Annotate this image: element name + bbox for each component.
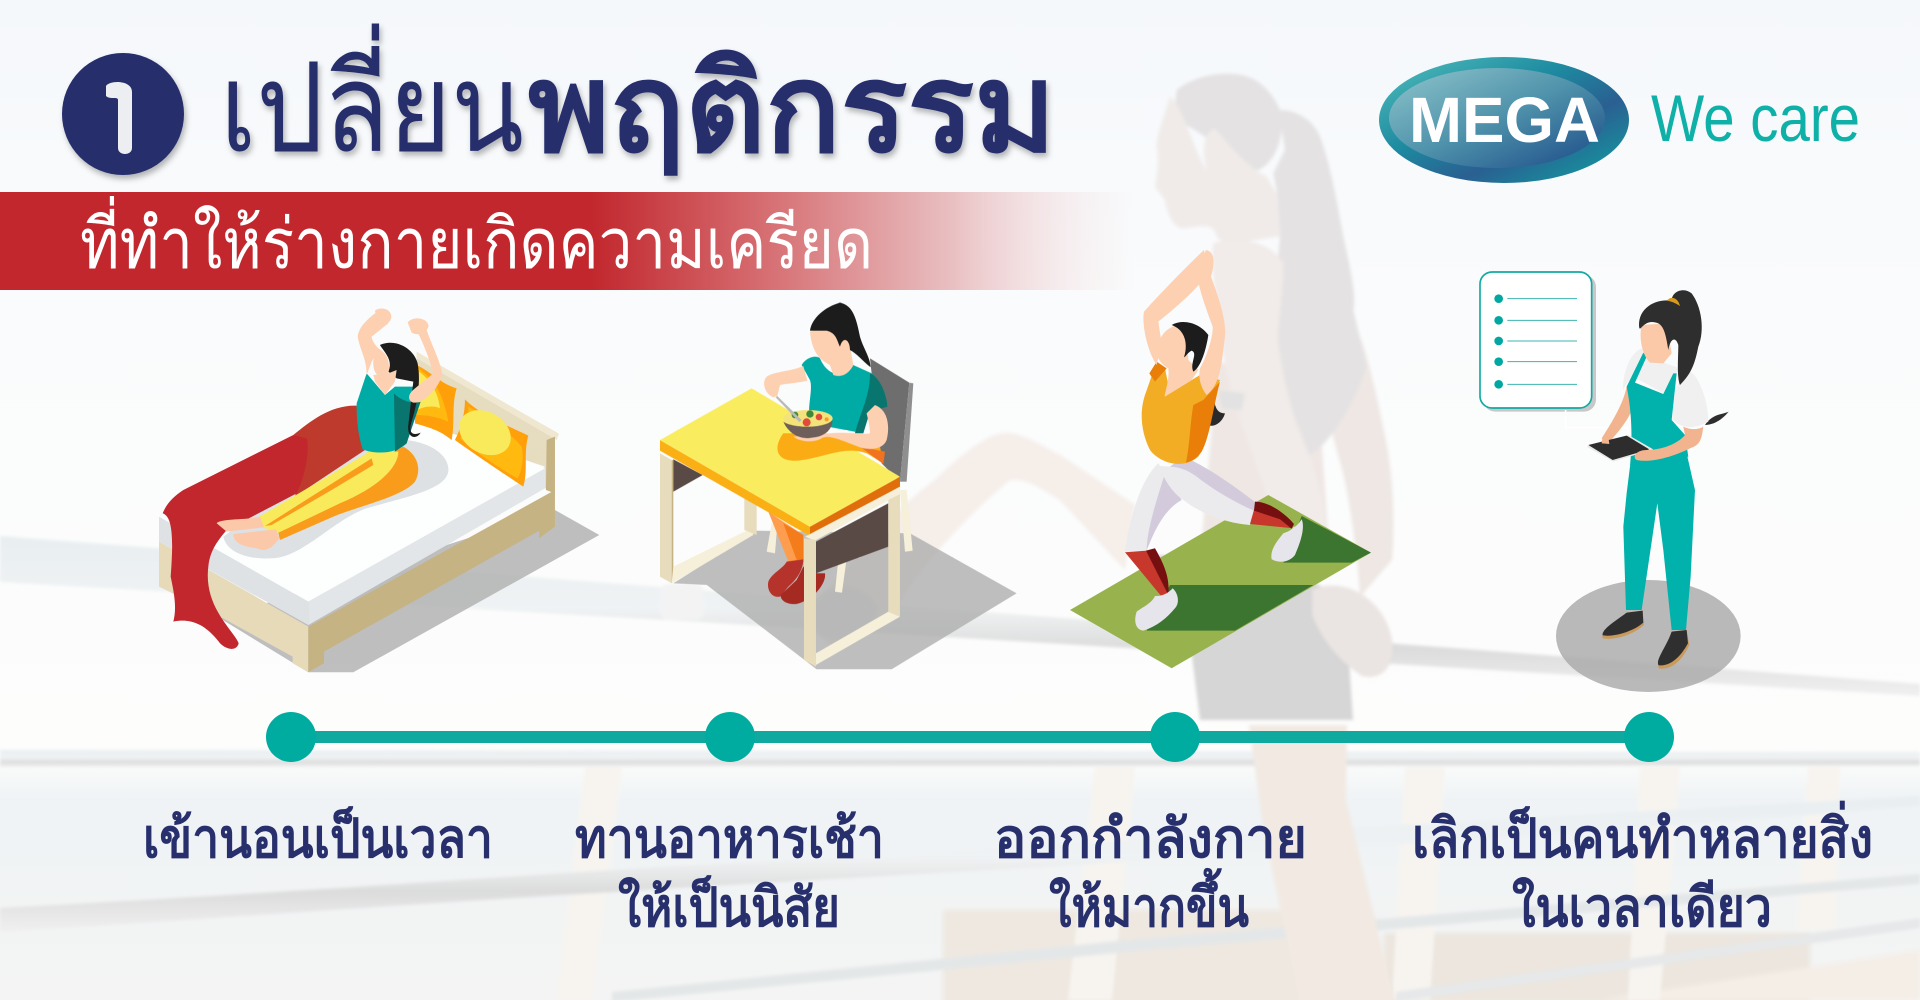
table shadow bbox=[673, 531, 1017, 669]
floor shadow bbox=[1556, 580, 1741, 692]
background: railing posts bbox=[556, 767, 1840, 1000]
step label 4: เลิกเป็นคนทำหลายสิ่ง bbox=[1412, 800, 1873, 869]
hair bbox=[1639, 290, 1702, 385]
illustration: woman with tablet and checklist bbox=[1480, 272, 1741, 692]
bed frame bbox=[159, 352, 559, 672]
torso bbox=[357, 373, 421, 453]
subtitle band bbox=[0, 192, 1135, 290]
overalls bbox=[1627, 353, 1688, 467]
illustration: woman eating at table bbox=[660, 303, 1017, 669]
step label 2: ทานอาหารเช้า bbox=[575, 809, 884, 869]
hair bbox=[810, 303, 871, 367]
subtitle: ที่ทำให้ร่างกายเกิดความเครียด bbox=[80, 196, 873, 283]
mattress bbox=[159, 420, 545, 625]
timeline node 1 bbox=[266, 712, 316, 762]
feet bbox=[217, 517, 279, 550]
hair bbox=[380, 343, 421, 437]
step label 4: ในเวลาเดียว bbox=[1512, 876, 1772, 938]
standing leg bbox=[1249, 725, 1396, 1000]
shoes bbox=[1602, 611, 1689, 669]
forearm and tablet bbox=[1587, 427, 1703, 462]
timeline node 4 bbox=[1624, 712, 1674, 762]
title number badge bbox=[62, 53, 184, 175]
shins bbox=[1125, 502, 1294, 597]
bed shadow bbox=[220, 510, 599, 672]
step label 3: ให้มากขึ้น bbox=[1049, 868, 1249, 938]
illustration: woman stretching on bed bbox=[159, 309, 599, 672]
hands bbox=[1312, 586, 1392, 677]
shirt bbox=[1142, 362, 1220, 464]
body bbox=[1200, 360, 1330, 560]
timeline node 2 bbox=[705, 712, 755, 762]
trousers bbox=[1125, 457, 1257, 552]
head hair bbox=[1172, 322, 1208, 372]
step label 4 bbox=[1412, 800, 1873, 938]
shoes bbox=[1135, 519, 1303, 631]
background: railings bbox=[0, 536, 1920, 1000]
pillows bbox=[415, 365, 528, 487]
sheet shadow bbox=[223, 440, 448, 559]
front table frame bbox=[804, 487, 900, 667]
left arm bbox=[1212, 240, 1327, 530]
step label 1: เข้านอนเป็นเวลา bbox=[143, 807, 493, 869]
title: เปลี่ยน bbox=[220, 23, 524, 178]
checklist card bbox=[1480, 272, 1628, 448]
step label 2: ให้เป็นนิสัย bbox=[618, 876, 840, 938]
table top bbox=[660, 388, 900, 536]
hair tail bbox=[1207, 397, 1225, 426]
logo wordmark: MEGA bbox=[1409, 84, 1600, 156]
head hair and ponytail bbox=[1155, 74, 1367, 461]
lower legs and shoes bbox=[768, 512, 825, 604]
trousers bbox=[259, 447, 418, 540]
right arm bbox=[1317, 310, 1393, 597]
tagline: We care bbox=[1651, 81, 1860, 155]
seated torso bbox=[802, 357, 887, 433]
face and arms bbox=[358, 309, 442, 403]
head and arms bbox=[764, 327, 888, 449]
foot bbox=[810, 587, 878, 641]
step label 2 bbox=[575, 809, 884, 938]
step label 3 bbox=[994, 809, 1307, 938]
blouse bbox=[1623, 348, 1708, 427]
title bbox=[220, 23, 1056, 178]
yoga mat bbox=[1070, 495, 1371, 668]
logo bbox=[1379, 57, 1860, 183]
shorts bbox=[1117, 555, 1353, 720]
timeline bbox=[266, 712, 1674, 762]
table frame bbox=[660, 453, 757, 583]
legs bbox=[1623, 453, 1695, 630]
raised leg bbox=[813, 433, 1135, 650]
salad bowl bbox=[776, 396, 833, 438]
lap bbox=[777, 433, 883, 463]
blanket bbox=[163, 406, 365, 649]
logo oval bbox=[1379, 57, 1629, 183]
arm back bbox=[1602, 387, 1635, 443]
background: deck bbox=[943, 910, 1920, 1000]
background: ghost woman bbox=[810, 74, 1396, 1000]
illustration: woman exercising on mat bbox=[1070, 250, 1371, 668]
timeline node 3 bbox=[1150, 712, 1200, 762]
arms and head bbox=[1143, 250, 1225, 397]
chair bbox=[767, 358, 913, 593]
hair tail bbox=[1705, 412, 1729, 425]
step label 3: ออกกำลังกาย bbox=[994, 809, 1307, 869]
title: พฤติกรรม bbox=[528, 40, 1056, 178]
head bbox=[1641, 323, 1672, 363]
